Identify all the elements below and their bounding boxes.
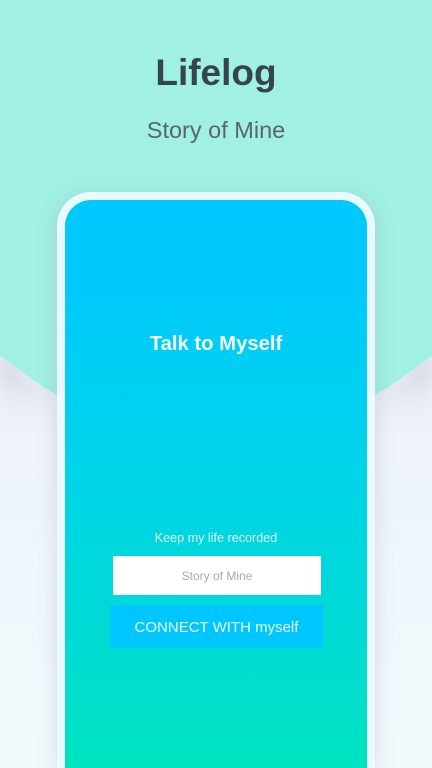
subtitle: Story of Mine bbox=[147, 117, 285, 143]
phone mockup bbox=[57, 192, 375, 768]
title: Lifelog bbox=[155, 52, 277, 93]
screen heading: Talk to Myself bbox=[150, 333, 282, 355]
input field bbox=[113, 556, 321, 595]
input field: Story of Mine bbox=[182, 569, 252, 583]
screen caption: Keep my life recorded bbox=[155, 531, 277, 545]
connect button: CONNECT WITH myself bbox=[135, 619, 298, 636]
connect button bbox=[110, 605, 323, 648]
